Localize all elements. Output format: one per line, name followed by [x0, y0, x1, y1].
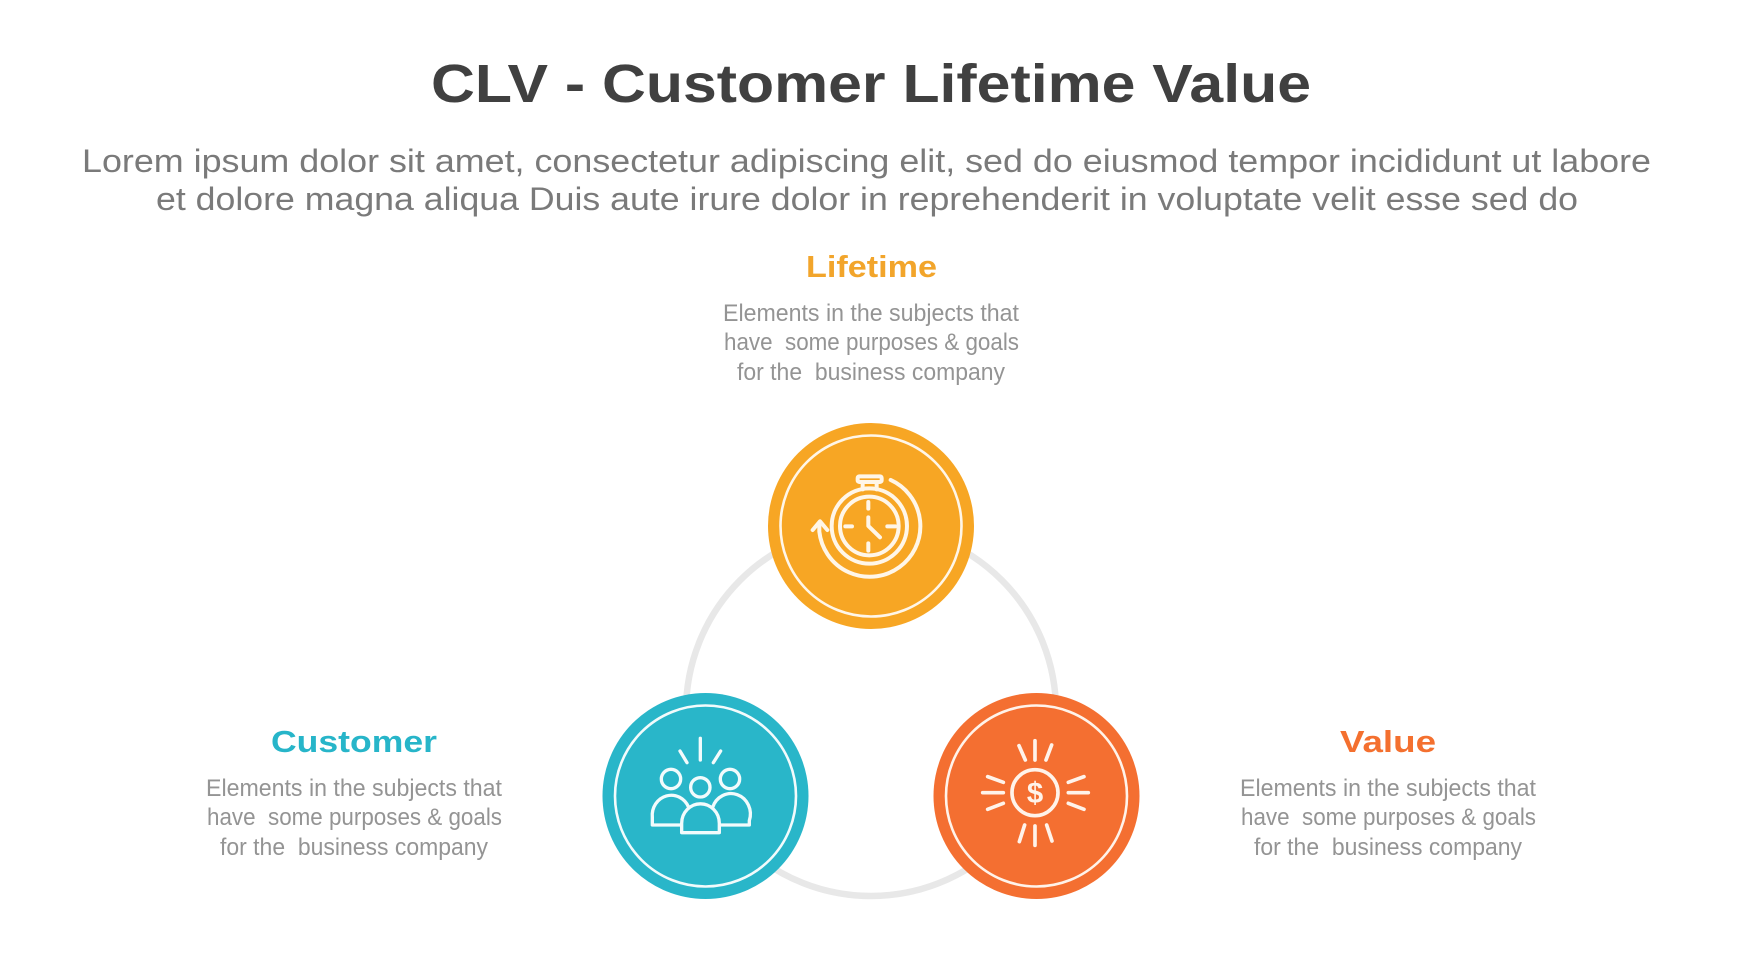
panel: lifetime [723, 249, 1019, 629]
panel: value [934, 693, 1536, 899]
text block: customer: for the business company [220, 834, 488, 861]
subtitle text block [82, 143, 1651, 217]
text block: value [1240, 775, 1536, 861]
heading: lifetime: Lifetime [806, 249, 937, 284]
icon circle: value dollar [934, 693, 1140, 899]
panel: customer [206, 693, 808, 899]
subtitle text block: Lorem ipsum dolor sit amet, consectetur adipiscing elit, sed do eiusmod tempor incididunt ut labore [82, 143, 1651, 179]
heading: value: Value [1340, 724, 1436, 759]
icon circle: lifetime stopwatch [768, 423, 974, 629]
text block: lifetime: Elements in the subjects that [723, 300, 1019, 327]
text block: customer: have some purposes & goals [207, 804, 502, 831]
text block: customer [206, 775, 502, 861]
text block: customer: Elements in the subjects that [206, 775, 502, 802]
text block: value: Elements in the subjects that [1240, 775, 1536, 802]
heading: customer: Customer [271, 724, 437, 759]
icon circle: value dollar: $ [1027, 777, 1043, 810]
text block: value: have some purposes & goals [1241, 804, 1536, 831]
text block: lifetime [723, 300, 1019, 386]
subtitle text block: et dolore magna aliqua Duis aute irure dolor in reprehenderit in voluptate velit esse sed do [156, 181, 1578, 217]
icon circle: customer group [602, 693, 808, 899]
text block: value: for the business company [1254, 834, 1522, 861]
title: CLV - Customer Lifetime Value [431, 54, 1311, 114]
connecting ring [686, 526, 1056, 896]
text block: lifetime: for the business company [737, 359, 1005, 386]
text block: lifetime: have some purposes & goals [724, 329, 1019, 356]
